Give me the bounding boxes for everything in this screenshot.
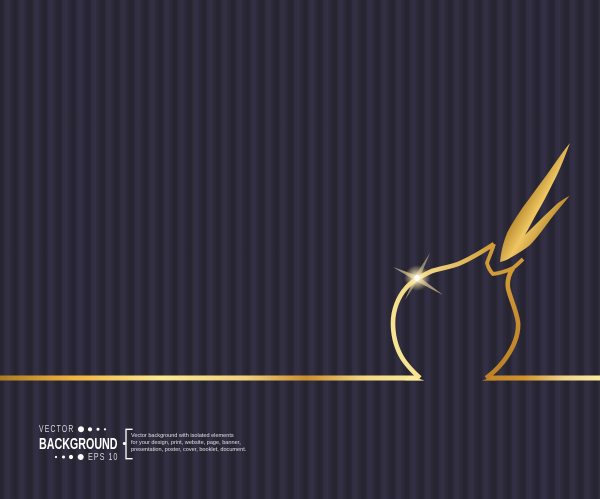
right line <box>490 376 600 380</box>
right body outline <box>486 268 518 378</box>
word: vector: VECTOR <box>39 424 74 435</box>
description: for your design, print, website, page, banner, <box>131 440 241 446</box>
description: presentation, poster, cover, booklet, document. <box>131 447 246 453</box>
word: eps 10: EPS 10 <box>88 452 118 463</box>
description: Vector background with isolated elements <box>131 433 234 439</box>
zigzag between outline and leaf <box>487 244 523 274</box>
decorative dots and bracket <box>54 426 133 460</box>
description <box>131 433 246 453</box>
label block <box>39 424 246 463</box>
left body outline <box>393 244 494 378</box>
left line <box>0 376 418 380</box>
left tip <box>405 376 424 381</box>
sparkle <box>393 253 443 300</box>
word: background: BACKGROUND <box>39 436 118 452</box>
leaf <box>500 143 570 262</box>
right tip <box>482 376 496 381</box>
